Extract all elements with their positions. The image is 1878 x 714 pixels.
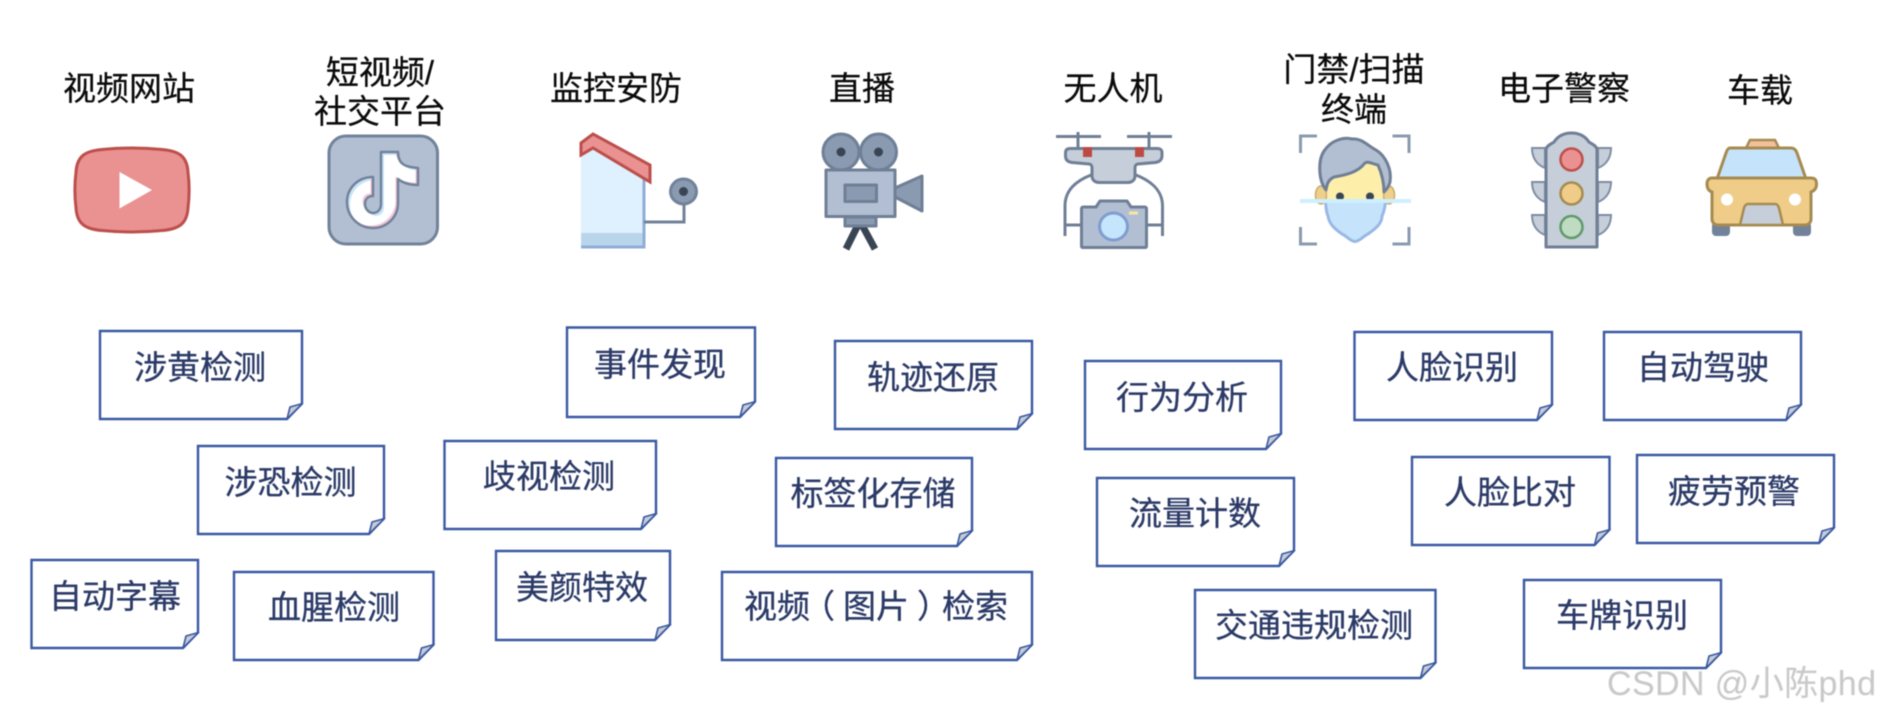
note: 车牌识别 <box>1524 580 1722 668</box>
note: 血腥检测 <box>234 572 434 660</box>
heading: 短视频/社交平台: 社交平台 <box>314 93 446 130</box>
heading: 无人机: 无人机 <box>1064 70 1162 107</box>
heading: 短视频/社交平台: 短视频/ <box>326 54 435 91</box>
note: 疲劳预警 <box>1637 455 1834 543</box>
note: 自动字幕 <box>32 560 198 648</box>
note: 事件发现: 事件发现 <box>594 346 726 383</box>
note: 轨迹还原: 轨迹还原 <box>867 359 999 396</box>
heading: 监控安防: 监控安防 <box>550 70 682 107</box>
icon: drone with camera <box>1056 132 1172 248</box>
watermark: CSDN @小陈phd <box>1607 665 1876 703</box>
heading: 直播: 直播 <box>829 70 895 107</box>
icon: traffic light <box>1532 133 1611 247</box>
note: 事件发现 <box>567 328 756 417</box>
heading: 门禁/扫描终端: 终端 <box>1321 91 1387 128</box>
note: 交通违规检测: 交通违规检测 <box>1215 607 1413 644</box>
note: 歧视检测: 歧视检测 <box>483 458 615 495</box>
note: 人脸识别 <box>1354 332 1552 420</box>
note: 美颜特效: 美颜特效 <box>516 569 648 606</box>
note: 流量计数 <box>1097 478 1294 566</box>
note: 疲劳预警: 疲劳预警 <box>1668 473 1800 510</box>
note: 人脸比对 <box>1412 457 1610 545</box>
note: 自动驾驶: 自动驾驶 <box>1637 349 1769 386</box>
note: 歧视检测 <box>444 441 656 529</box>
note: 人脸识别: 人脸识别 <box>1386 349 1518 386</box>
note: 涉恐检测: 涉恐检测 <box>224 464 356 501</box>
icon: masked face scan <box>1300 136 1411 244</box>
note: 流量计数: 流量计数 <box>1129 495 1261 532</box>
icon: short video app <box>329 136 438 244</box>
note: 视频（图片）检索: 视频（图片）检索 <box>744 588 1008 625</box>
note: 自动字幕: 自动字幕 <box>49 578 181 615</box>
note: 交通违规检测 <box>1195 590 1436 678</box>
note: 视频（图片）检索 <box>722 572 1032 660</box>
heading: 短视频/社交平台 <box>314 54 446 130</box>
note: 涉黄检测 <box>100 331 302 419</box>
icon: video site play button <box>75 148 189 232</box>
icon: film camera on tripod <box>823 134 922 249</box>
note: 涉恐检测 <box>198 446 384 534</box>
note: 涉黄检测: 涉黄检测 <box>134 349 266 386</box>
icon: security house with camera <box>581 134 696 248</box>
note: 标签化存储: 标签化存储 <box>790 475 956 512</box>
note: 行为分析 <box>1085 361 1282 449</box>
heading: 门禁/扫描终端 <box>1283 51 1425 128</box>
note: 自动驾驶 <box>1604 332 1802 420</box>
heading: 门禁/扫描终端: 门禁/扫描 <box>1283 51 1425 88</box>
heading: 视频网站: 视频网站 <box>63 70 195 107</box>
icon: taxi <box>1707 140 1816 236</box>
note: 行为分析: 行为分析 <box>1116 379 1248 416</box>
note: 轨迹还原 <box>835 341 1032 429</box>
heading: 车载: 车载 <box>1727 72 1793 109</box>
note: 美颜特效 <box>496 551 670 640</box>
heading: 电子警察: 电子警察 <box>1498 70 1630 107</box>
note: 车牌识别: 车牌识别 <box>1556 597 1688 634</box>
note: 标签化存储 <box>776 458 972 546</box>
note: 人脸比对: 人脸比对 <box>1444 474 1576 511</box>
note: 血腥检测: 血腥检测 <box>268 589 400 626</box>
